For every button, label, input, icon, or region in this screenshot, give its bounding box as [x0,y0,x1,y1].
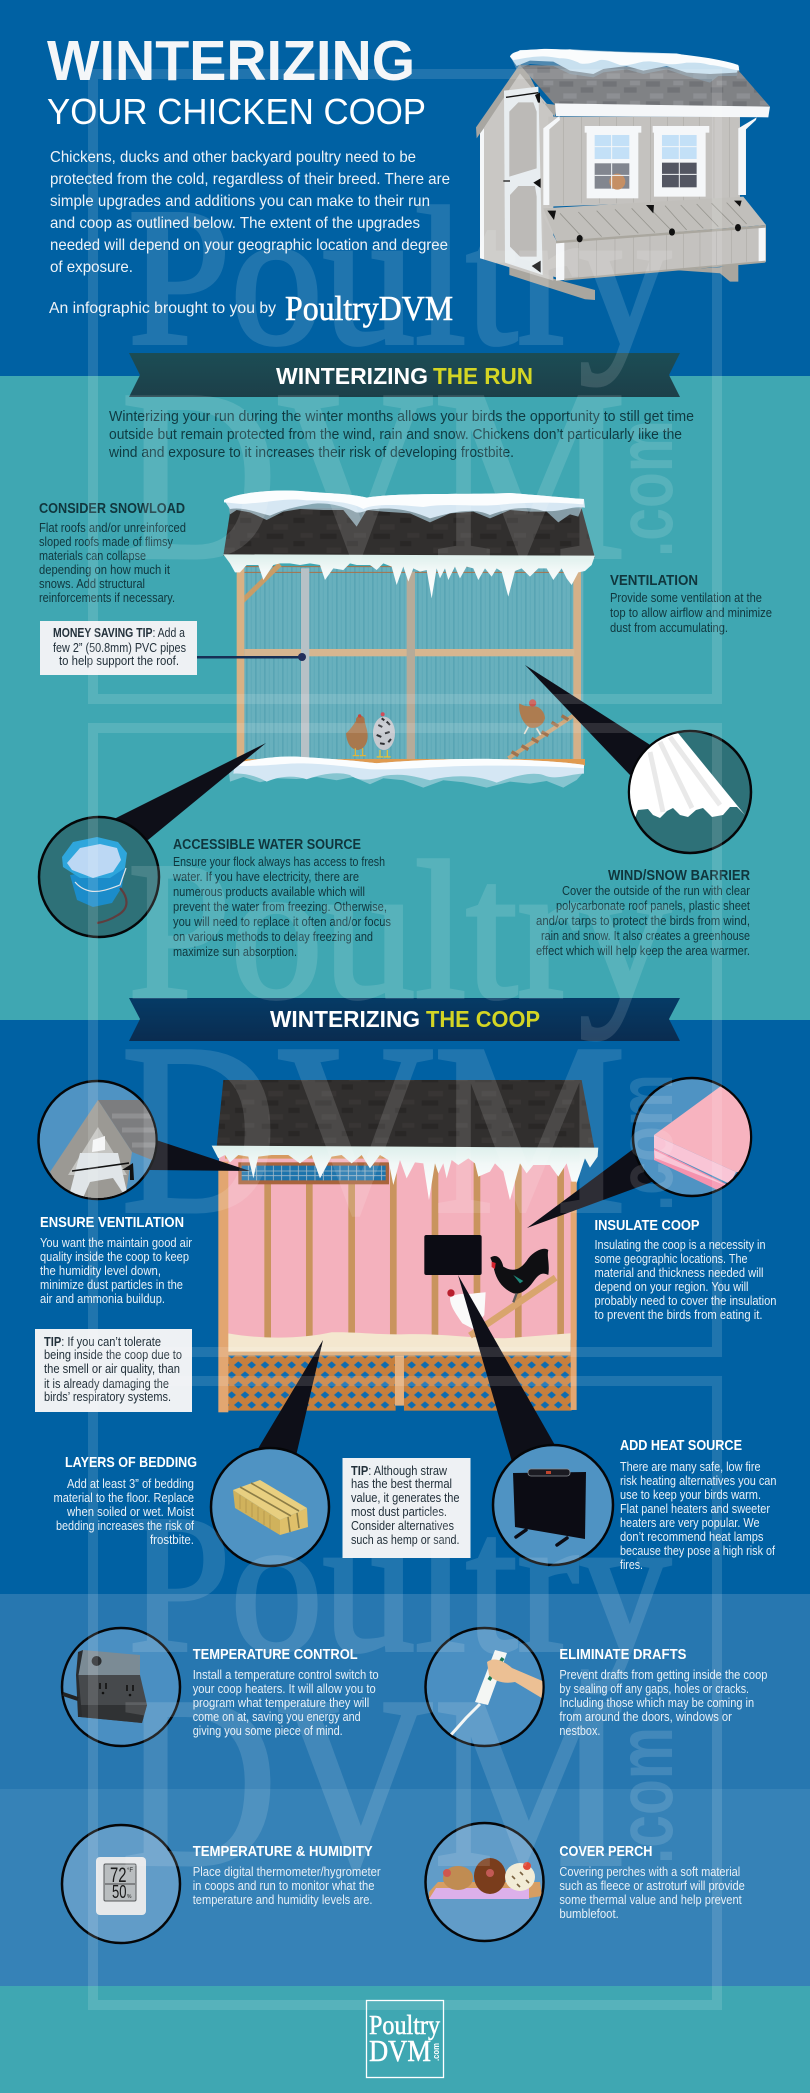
text: ventilation: Provide some ventilation at the [610,590,762,605]
callout: air quality tip: TIP: If you can’t tolerate [44,1334,161,1349]
text: add heat source: Flat panel heaters and sweeter [620,1501,771,1516]
text: temperature and humidity: in coops and run to monitor what the [193,1878,374,1893]
text: add heat source: There are many safe, low fire [620,1459,760,1474]
text: insulate coop: Insulating the coop is a necessity in [594,1237,766,1252]
text: add heat source: risk heating alternatives you can [620,1473,776,1488]
icon: roof vent circle [38,1081,157,1200]
text: ensure ventilation: the humidity level down, [40,1263,161,1278]
text: accessible water source: ACCESSIBLE WATER SOURCE [173,837,361,853]
callout: money saving tip: to help support the roof. [59,653,179,668]
footer logo: .com [431,2043,441,2061]
ramp [508,716,573,758]
text: accessible water source [172,837,391,959]
perch [470,1278,556,1336]
ground snow [228,756,584,788]
callout: straw tip: such as hemp or sand. [351,1532,460,1547]
text: eliminate drafts: Including those which may be coming in [559,1695,754,1710]
callout: air quality tip: it is already damaging the [44,1376,169,1391]
icon: straw bale circle [211,1448,329,1566]
footer logo: DVM [369,2033,431,2068]
banner: winterizing the coop [129,998,680,1041]
background: light blue band [0,1789,810,1986]
white hen [447,1289,486,1329]
icon: insulation board circle [633,1078,760,1196]
intro text block: and coop as outlined below. The extent of the upgrades [50,215,420,232]
text: consider snowload: depending on how much it [39,562,170,577]
text: consider snowload: sloped roofs made of flimsy [39,534,173,549]
title [47,29,426,132]
banner: winterizing the coop: WINTERIZING [270,1006,420,1032]
text: consider snowload: CONSIDER SNOWLOAD [39,501,185,517]
watermark overlay: DVM [121,1647,626,1917]
text: wind/snow barrier: Cover the outside of the run with clear [562,883,751,898]
text: temperature control: TEMPERATURE CONTROL [193,1647,358,1663]
text: layers of bedding [54,1455,197,1547]
text: add heat source: use to keep your birds warm. [620,1487,761,1502]
text: insulate coop: INSULATE COOP [594,1218,700,1234]
text: temperature control: Install a temperature control switch to [193,1667,379,1682]
callout: air quality tip: being inside the coop due to [44,1347,182,1362]
text: add heat source: because they pose a high risk of [620,1543,775,1558]
icon: thermometer hygrometer: % [127,1894,132,1900]
text: cover perch: some thermal value and help prevent [559,1892,742,1907]
callout: money saving tip [40,621,197,675]
bedding [227,1332,571,1352]
callout wedge: bedding [256,1340,323,1456]
watermark overlay: .com [601,1727,689,1864]
text: insulate coop: to prevent the birds from eating it. [594,1307,762,1322]
icon: thermometer hygrometer: 50 [112,1882,126,1902]
text: layers of bedding: bedding increases the risk of [56,1518,194,1533]
background: blue coop band [0,1020,810,1594]
text: ensure ventilation: air and ammonia buildup. [40,1291,165,1306]
heater panel on wall [424,1235,482,1275]
panel: hero header [47,29,770,328]
text: wind/snow barrier: WIND/SNOW BARRIER [608,868,750,884]
chicken: hen on ramp [519,699,545,735]
icon: thermometer hygrometer [62,1825,180,1943]
text: layers of bedding: Add at least 3” of bedding [67,1476,194,1491]
text: accessible water source: on various methods to delay freezing and [173,929,373,944]
callout: money saving tip: few 2” (50.8mm) PVC pipes [53,640,186,655]
callout: air quality tip: birds’ respiratory systems. [44,1389,171,1404]
callout: straw tip: Consider alternatives [351,1518,454,1533]
text: layers of bedding: when soiled or wet. Moist [66,1504,194,1519]
vent with mesh [238,1162,389,1184]
title: YOUR CHICKEN COOP [47,91,426,132]
text: temperature control: giving you some piece of mind. [193,1723,343,1738]
text: add heat source: ADD HEAT SOURCE [620,1438,742,1454]
text block: run introduction: wind and exposure to it increases their risk of developing frostbite. [108,445,514,461]
callout wedge: wind barrier [525,665,655,775]
callout: straw tip: most dust particles. [351,1504,447,1519]
text: ventilation: dust from accumulating. [610,620,728,635]
wall studs [264,1155,564,1338]
text: ventilation: top to allow airflow and minimize [610,605,772,620]
watermark overlay [88,69,722,2010]
intro text block: Chickens, ducks and other backyard poultry need to be [50,149,416,166]
watermark overlay: Poultry [128,1474,671,1693]
text: ensure ventilation: quality inside the coop to keep [40,1249,189,1264]
callout: air quality tip: the smell or air quality, than [44,1361,180,1376]
text: eliminate drafts: Prevent drafts from getting inside the coop [559,1667,767,1682]
text: ensure ventilation [40,1215,193,1306]
icon: caulk gun [426,1628,545,1746]
rooster [490,1249,549,1302]
watermark overlay: DVM [121,994,626,1264]
watermark overlay: Poultry [128,821,671,1040]
text: insulate coop: material and thickness needed will [594,1265,764,1280]
roof [223,508,595,558]
text: add heat source [620,1438,776,1572]
byline with PoultryDVM logo: PoultryDVM [285,289,453,328]
text: accessible water source: maximize sun absorption. [173,944,297,959]
text: temperature control: come on at, saving you energy and [193,1709,361,1724]
text: consider snowload: snows. Add structural [39,576,145,591]
text: add heat source: fires. [620,1557,643,1572]
corner posts [218,1162,577,1412]
watermark overlay: Poultry [128,167,671,386]
background: teal footer band [0,1986,810,2093]
callout: straw tip: value, it generates the [351,1490,460,1505]
corrugated panels [243,567,583,760]
chicken: brown hen [346,714,368,756]
text: temperature and humidity: Place digital thermometer/hygrometer [193,1864,381,1879]
banner: winterizing the run: THE RUN [433,363,533,389]
text: ensure ventilation: minimize dust particles in the [40,1277,183,1292]
illustration: snow-covered chicken coop [476,49,770,300]
icon: covered perch with hens [426,1823,544,1941]
text: add heat source: heaters are very popular. We [620,1515,760,1530]
text: temperature control: program what temperature they will [193,1695,369,1710]
insulation wall [219,1150,577,1340]
text: eliminate drafts: nestbox. [559,1723,600,1738]
text: eliminate drafts: from around the doors, windows or [559,1709,732,1724]
icon: temperature control switch [62,1628,180,1746]
text: cover perch: Covering perches with a soft material [559,1864,740,1879]
roof snow [224,491,585,527]
text: accessible water source: Ensure your flock always has access to fresh [173,854,385,869]
text: cover perch [559,1844,745,1921]
text: temperature and humidity: TEMPERATURE & HUMIDITY [193,1844,373,1860]
callout wedge: heat source [458,1275,556,1462]
background: top blue band [0,0,810,376]
lattice skirting [227,1356,572,1411]
text: eliminate drafts [559,1647,767,1738]
callout wedge: ventilation [150,1138,250,1171]
banner: winterizing the run: WINTERIZING [276,363,428,389]
icon: panel heater circle [493,1445,613,1565]
text: ensure ventilation: ENSURE VENTILATION [40,1215,184,1231]
text: layers of bedding: LAYERS OF BEDDING [65,1455,197,1471]
text: ventilation: VENTILATION [610,573,698,589]
text: layers of bedding: material to the floor. Replace [54,1490,194,1505]
intro text block: simple upgrades and additions you can make to their run [50,193,430,210]
icon: corrugated panel circle [620,731,751,853]
icon: water bucket circle [39,817,159,937]
text: wind/snow barrier [536,868,751,958]
intro text block [50,149,450,276]
watermark overlay: .com [601,420,689,557]
text: ventilation [610,573,772,635]
callout: straw tip [342,1458,470,1558]
frame posts and rail [237,565,585,766]
banner: winterizing the coop: THE COOP [426,1006,540,1032]
watermark overlay: .com [601,1074,689,1211]
callout wedge: insulation [527,1147,652,1228]
byline with PoultryDVM logo [49,289,453,328]
intro text block: of exposure. [50,259,133,276]
text: temperature and humidity: temperature and humidity levels are. [193,1892,372,1907]
callout: straw tip: has the best thermal [351,1476,452,1491]
text: cover perch: COVER PERCH [559,1844,652,1860]
background: teal run band [0,376,810,1020]
intro text block: needed will depend on your geographic location and degree [50,237,448,254]
text: add heat source: don’t recommend heat lamps [620,1529,764,1544]
text: consider snowload: materials can collapse [39,548,146,563]
title: WINTERIZING [47,29,415,93]
text: insulate coop [594,1218,776,1322]
byline with PoultryDVM logo: An infographic brought to you by [49,300,276,317]
text: consider snowload [39,501,186,605]
banner: winterizing the run [129,353,680,397]
text: insulate coop: depend on your region. You will [594,1279,749,1294]
text: consider snowload: Flat roofs and/or unreinforced [39,520,186,535]
text block: run introduction: outside but remain protected from the wind, rain and snow. Chickens don’t particularly like the [109,427,682,443]
text: accessible water source: you will need to replace it often and/or focus [173,914,391,929]
text block: run introduction: Winterizing your run during the winter months allows your birds the opportunity to still get time [109,409,694,425]
chicken: speckled hen [373,712,395,757]
text: layers of bedding: frostbite. [150,1532,194,1547]
text: temperature control: your coop heaters. It will allow you to [193,1681,376,1696]
text: insulate coop: probably need to cover the insulation [594,1293,776,1308]
callout: straw tip: TIP: Although straw [351,1463,448,1478]
callout wedge: water source [112,743,266,840]
footer logo [366,2000,444,2078]
text: wind/snow barrier: and/or tarps to protect the birds from wind, [536,913,750,928]
watermark overlay: DVM [121,340,626,610]
text: accessible water source: prevent the water from freezing. Otherwise, [173,899,387,914]
background: mid blue band [0,1594,810,1789]
text: wind/snow barrier: rain and snow. It also creates a greenhouse [541,928,750,943]
footer logo: Poultry [369,2010,440,2040]
roof [217,1080,594,1148]
text: cover perch: such as fleece or astroturf will provide [559,1878,745,1893]
icon: thermometer hygrometer: 72 [110,1864,126,1887]
text: temperature control [193,1647,379,1738]
text block: run introduction [108,409,694,461]
icon: thermometer hygrometer: °F [127,1868,133,1874]
text: eliminate drafts: ELIMINATE DRAFTS [559,1647,687,1663]
text: accessible water source: numerous products available which will [173,884,365,899]
text: accessible water source: water. If you have electricity, there are [172,869,359,884]
text: consider snowload: reinforcements if necessary. [39,590,175,605]
text: eliminate drafts: by sealing off any gaps, holes or cracks. [559,1681,749,1696]
eave icicles [212,1146,598,1200]
text: temperature and humidity [193,1844,381,1907]
intro text block: protected from the cold, regardless of their breed. There are [50,171,450,188]
text: cover perch: bumblefoot. [559,1906,619,1921]
callout: money saving tip: MONEY SAVING TIP: Add a [53,625,186,640]
callout: air quality tip [35,1329,192,1412]
text: wind/snow barrier: effect which will help keep the area warmer. [536,943,750,958]
illustration: chicken run with snow [223,491,595,788]
eave icicles [223,554,595,598]
illustration: coop cross-section [212,1080,598,1412]
text: wind/snow barrier: polycarbonate roof panels, plastic sheet [556,898,750,913]
tip connector line [197,653,306,661]
text: ensure ventilation: You want the maintain good air [40,1235,193,1250]
text: insulate coop: some geographic locations. The [594,1251,748,1266]
